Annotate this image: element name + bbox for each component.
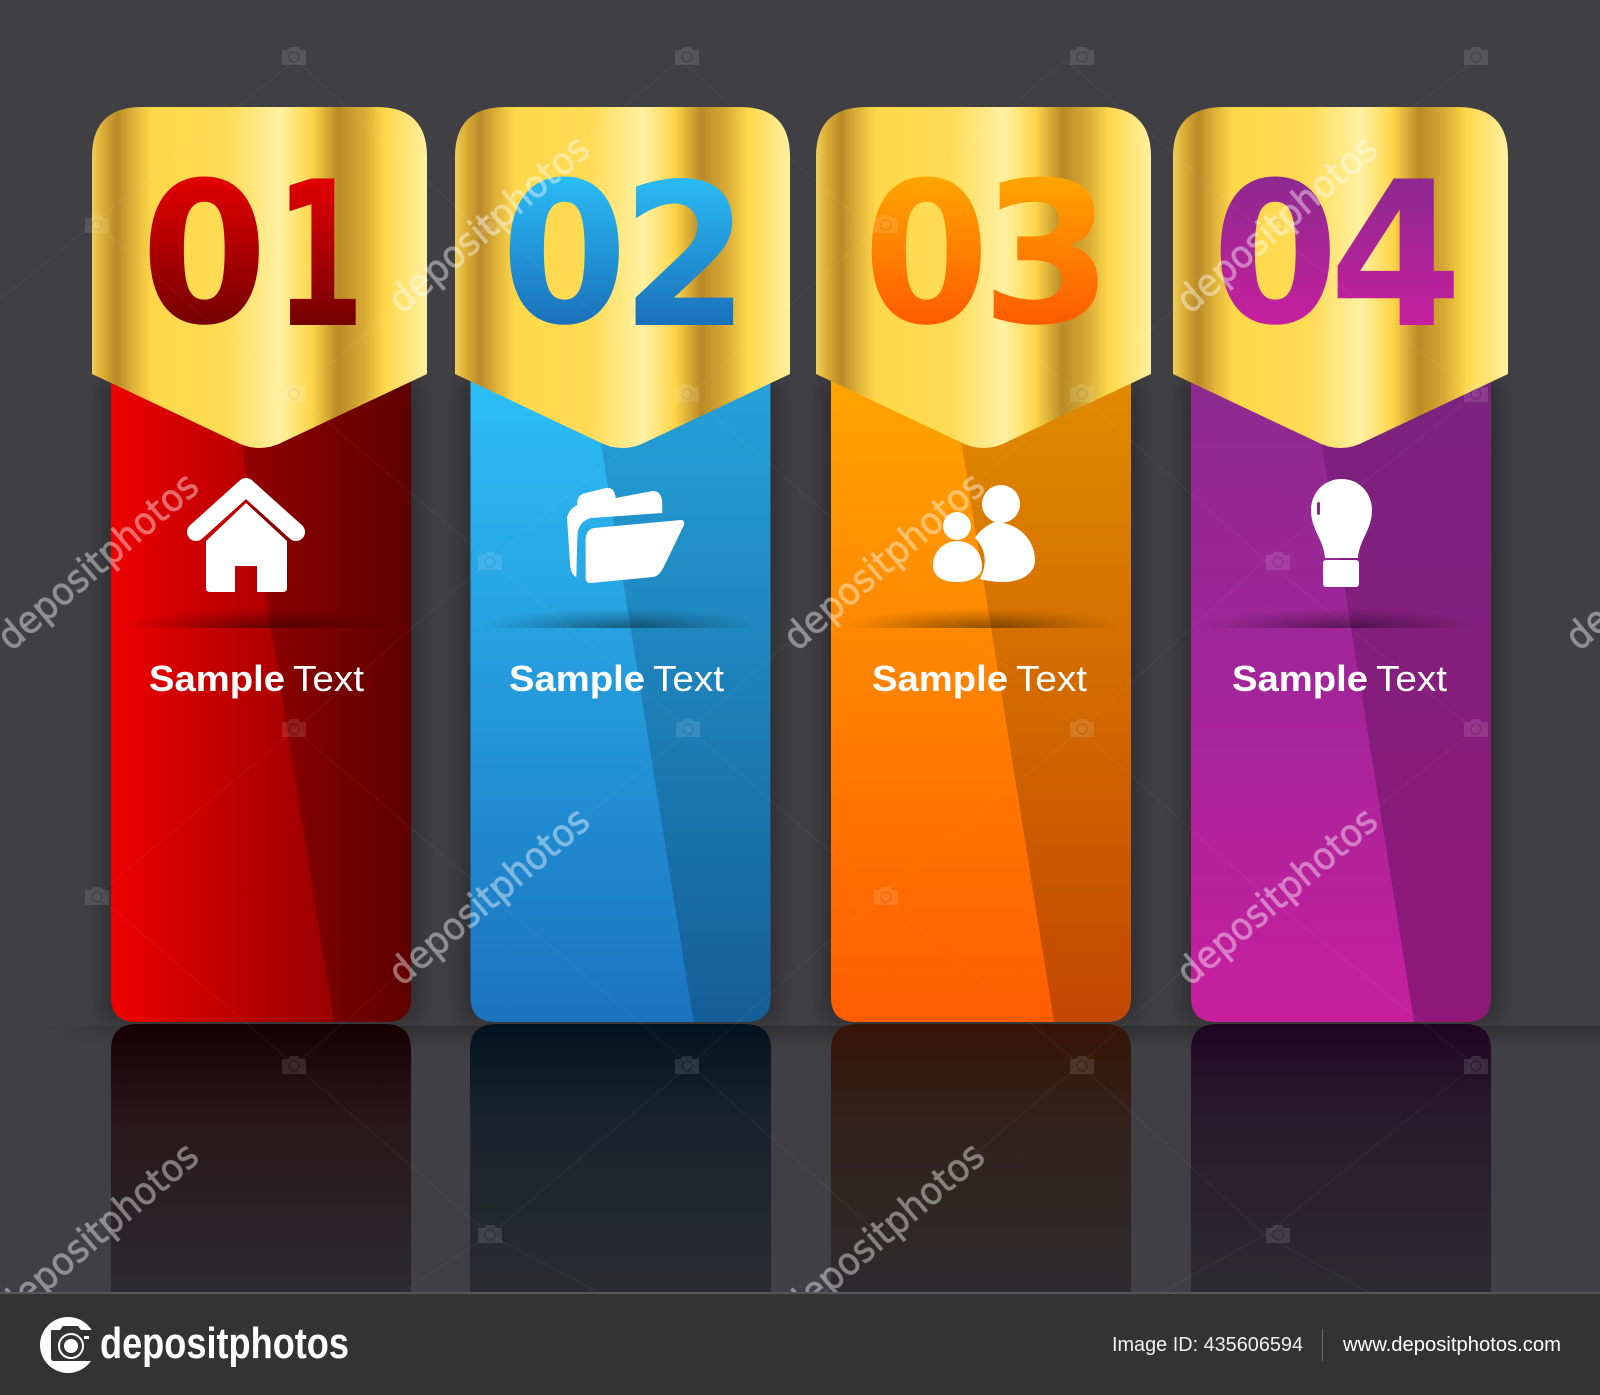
- footer image id: Image ID: 435606594: [1112, 1334, 1303, 1356]
- number 04: 0: [1212, 141, 1339, 369]
- footer divider: [1322, 1329, 1323, 1361]
- label: card 1: Sample: [149, 658, 285, 699]
- label: card 2: Sample: [509, 658, 645, 699]
- gold badge 4: [1173, 107, 1508, 448]
- number 03: 3: [981, 141, 1113, 369]
- watermark: depositphotos text: depositphotos: [775, 1134, 993, 1329]
- number 04: [1212, 140, 1463, 373]
- footer top edge: [0, 1292, 1600, 1294]
- reflections: [111, 1024, 1491, 1292]
- panel 3: orange card: [831, 340, 1131, 1022]
- number 03: [863, 141, 1113, 369]
- label: card 3: Sample: [872, 658, 1008, 699]
- number 04: 4: [1329, 140, 1463, 373]
- panel 4: purple card: [1191, 340, 1491, 1022]
- panel 2: blue card: [470, 340, 770, 1022]
- number 01: 0: [141, 141, 268, 369]
- footer url: www.depositphotos.com: [1342, 1334, 1561, 1356]
- number 02: 0: [501, 141, 628, 369]
- number 02: 2: [621, 143, 749, 373]
- watermark: depositphotos text: depositphotos: [1168, 799, 1386, 994]
- panel 1: red card: [111, 340, 411, 1022]
- watermark: depositphotos text: depositphotos: [775, 464, 993, 659]
- gold badge 2: [455, 107, 790, 448]
- icon: light bulb: [1311, 479, 1372, 587]
- watermark: camera icons: [85, 47, 1488, 1243]
- icon: house: [196, 487, 296, 592]
- footer bar: [0, 1294, 1600, 1395]
- label: card 4: Sample: [1232, 658, 1368, 699]
- watermark: depositphotos text: depositphotos: [380, 799, 598, 994]
- label: card 3: Text: [1016, 658, 1087, 699]
- number 01: [141, 138, 365, 373]
- watermark: depositphotos text: depositphotos: [380, 127, 598, 322]
- watermark: depositphotos text: depositphotos: [1168, 127, 1386, 322]
- label: card 4: Text: [1376, 658, 1447, 699]
- gold badge 1: [92, 107, 427, 448]
- icon: people: [933, 485, 1035, 582]
- label: card 2: Text: [653, 658, 724, 699]
- floor shadow: [398, 1026, 1600, 1036]
- number 01: 1: [275, 138, 365, 373]
- label: card 1: Text: [293, 658, 364, 699]
- icon: folder: [567, 488, 684, 583]
- gold badge 3: [816, 107, 1151, 448]
- footer logo icon: [40, 1317, 96, 1373]
- number 03: 0: [863, 141, 990, 369]
- card side shadows: [104, 380, 1498, 1020]
- footer logo text: depositphotos: [100, 1319, 349, 1368]
- number 02: [501, 141, 749, 373]
